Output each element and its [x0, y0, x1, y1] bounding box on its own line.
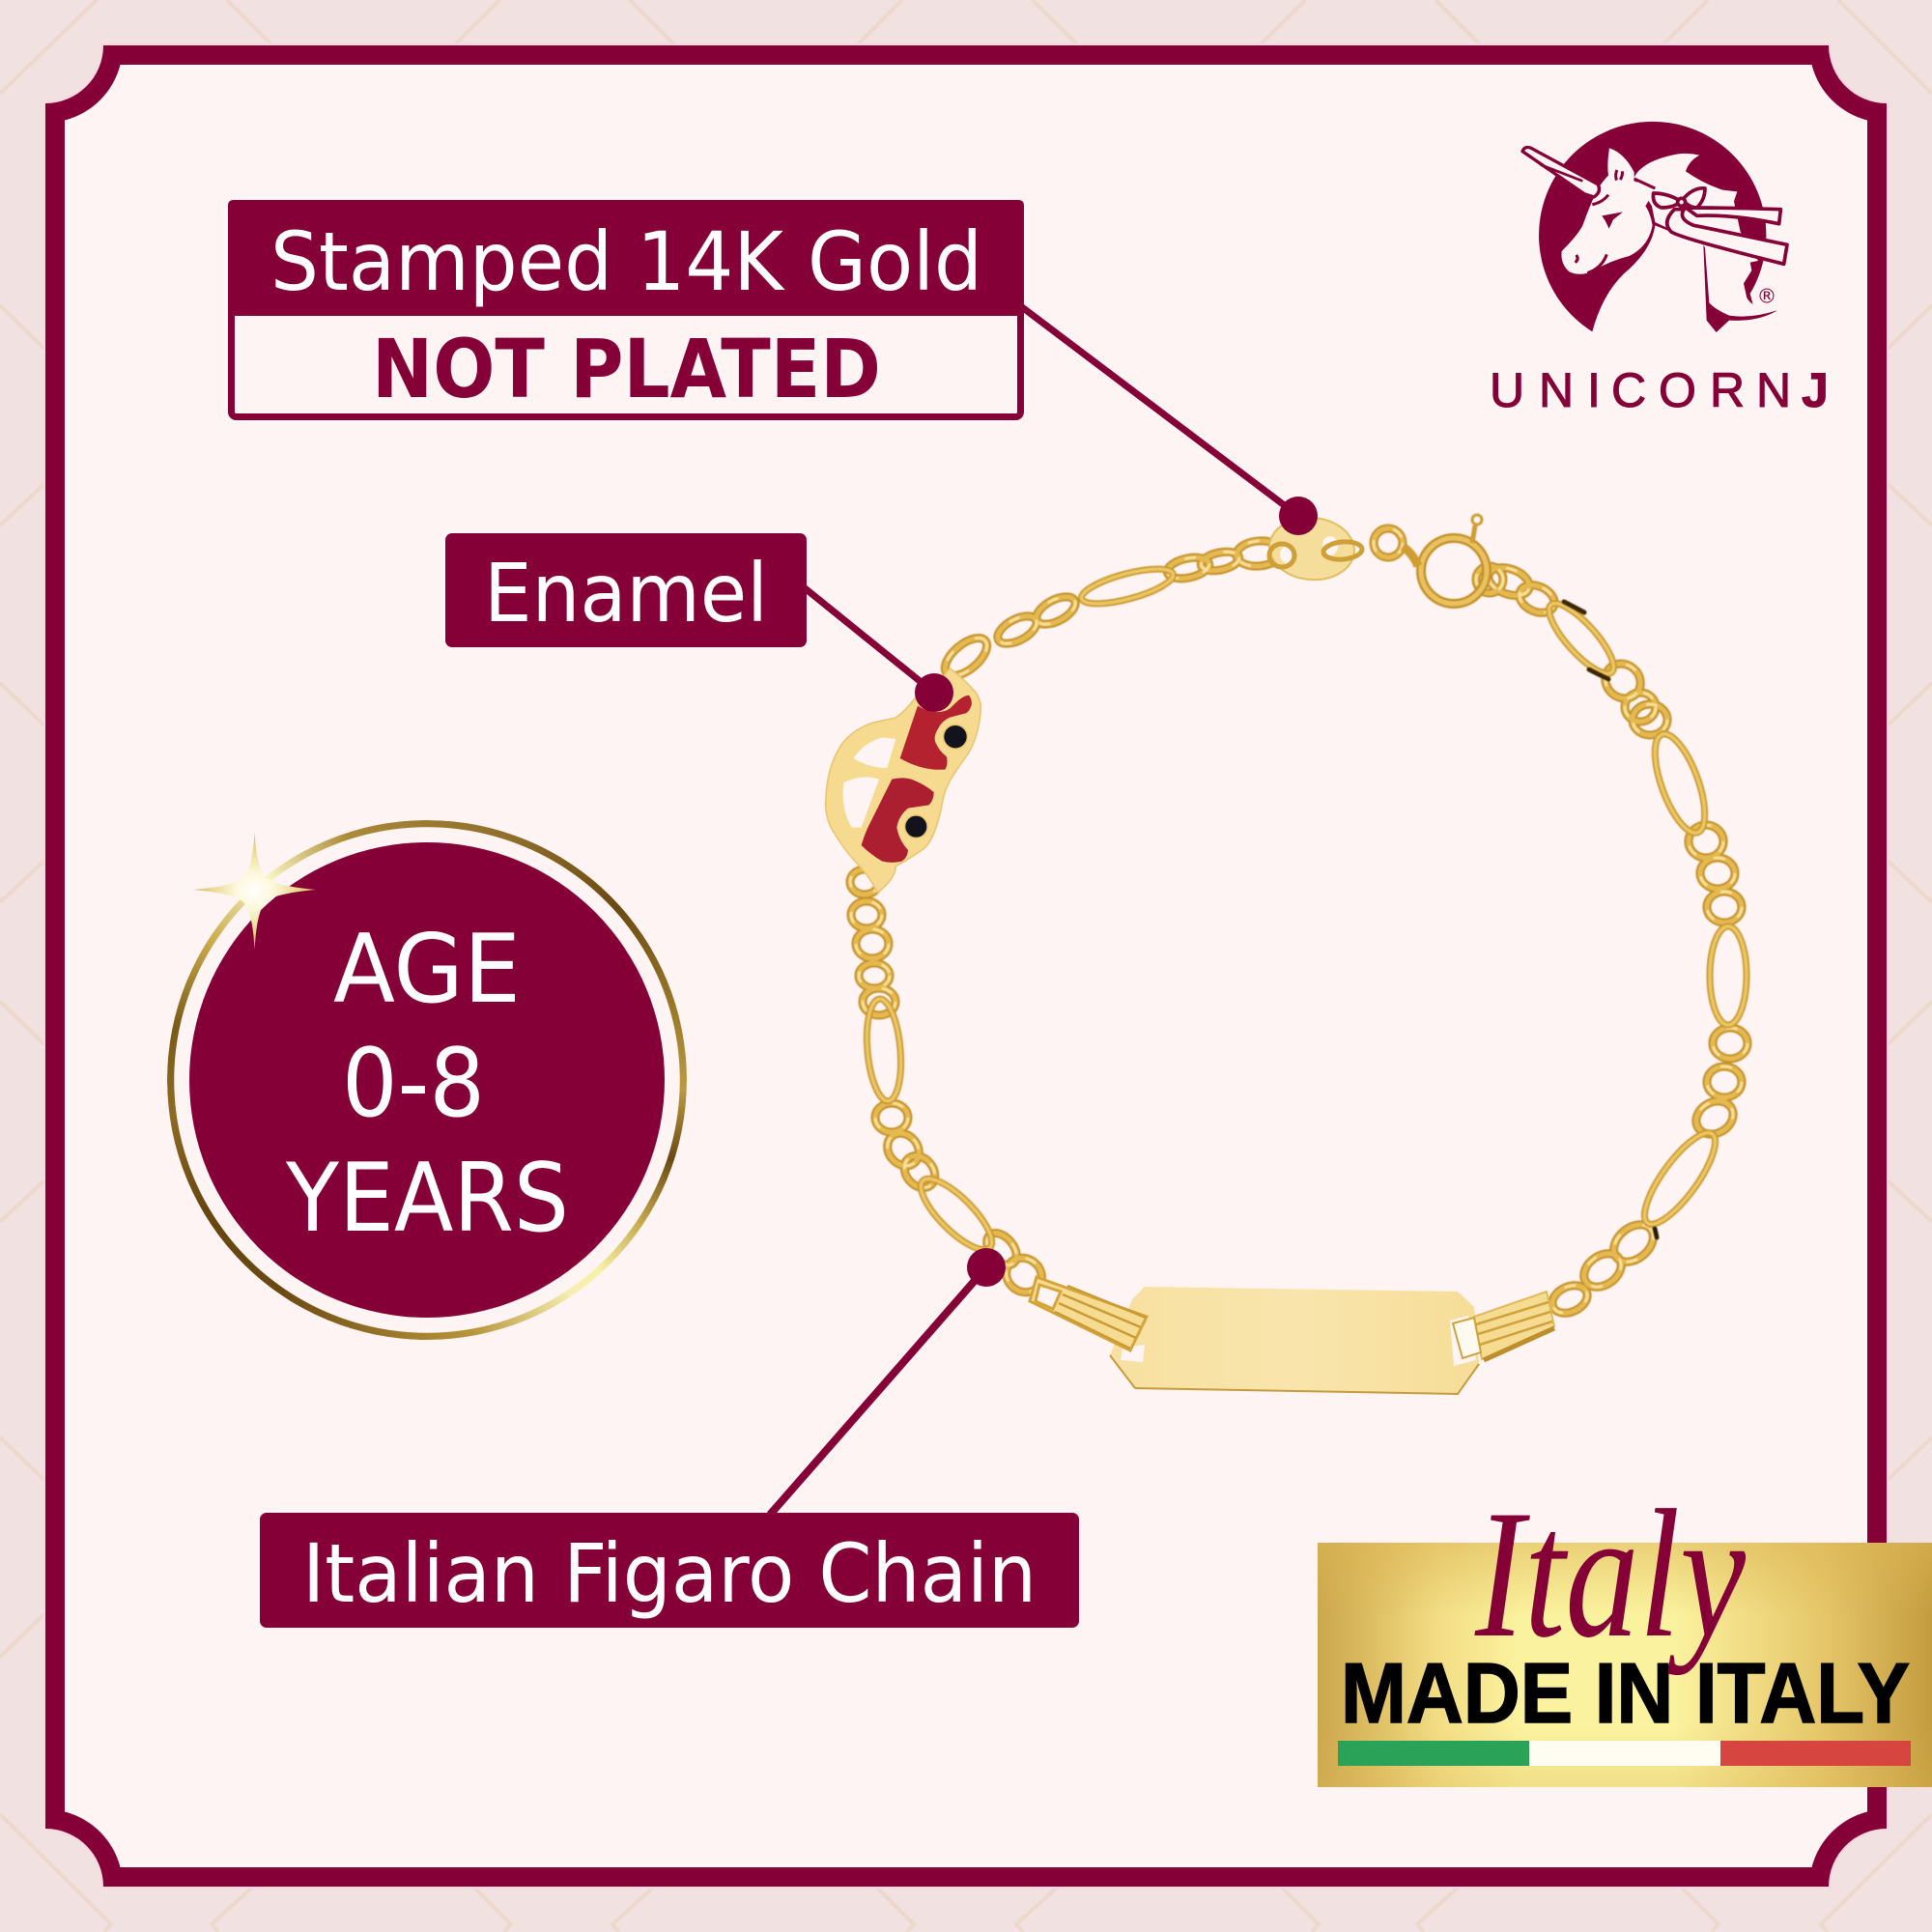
- registered mark: ®: [1757, 284, 1776, 307]
- callout: stamped 14K gold not plated: [228, 200, 1024, 417]
- burgundy disc: [1539, 122, 1776, 332]
- text: 0-8: 0-8: [342, 1029, 485, 1139]
- made in italy badge: [1318, 1473, 1932, 1787]
- icon: sparkle star: [193, 832, 316, 950]
- leader line and dot: enamel: [804, 587, 953, 712]
- callout: enamel: [445, 533, 807, 647]
- text: age: AGE: [333, 915, 521, 1025]
- burgundy disc: [189, 842, 665, 1318]
- age badge: [167, 820, 687, 1340]
- enamel car charm: [826, 668, 980, 893]
- ribbon bow: [1653, 188, 1787, 264]
- text: years: YEARS: [285, 1144, 569, 1254]
- engraved plate: [1110, 1287, 1479, 1394]
- callout: enamel: Enamel: [484, 546, 768, 640]
- mane and neck: [1634, 154, 1776, 317]
- callout: italian figaro chain: Italian Figaro Chain: [302, 1526, 1037, 1621]
- eye: [1602, 212, 1623, 229]
- text: italy script: Italy: [1474, 1473, 1747, 1676]
- gold bracelet: [826, 514, 1747, 1394]
- bracelet chain links: [850, 515, 1747, 1319]
- right fluted tube: [1453, 1292, 1554, 1360]
- italian flag bar: [1338, 1741, 1911, 1766]
- horn: [1522, 148, 1599, 197]
- spring ring clasp: [1403, 515, 1487, 604]
- leader line and dot: figaro chain: [770, 1248, 1006, 1515]
- clasp tag: [1266, 514, 1363, 583]
- text: not plated: NOT PLATED: [372, 322, 881, 416]
- logo wordmark: UNICORNJ: [1490, 363, 1829, 417]
- logo: unicorn head: [1522, 122, 1787, 332]
- gold ring: [167, 820, 687, 1340]
- leader line and dot: stamped gold: [1022, 307, 1318, 535]
- head: [1561, 148, 1655, 274]
- text: stamped 14K gold: Stamped 14K Gold: [270, 214, 982, 309]
- face details: [1576, 170, 1655, 273]
- left fluted tube: [1030, 1277, 1147, 1350]
